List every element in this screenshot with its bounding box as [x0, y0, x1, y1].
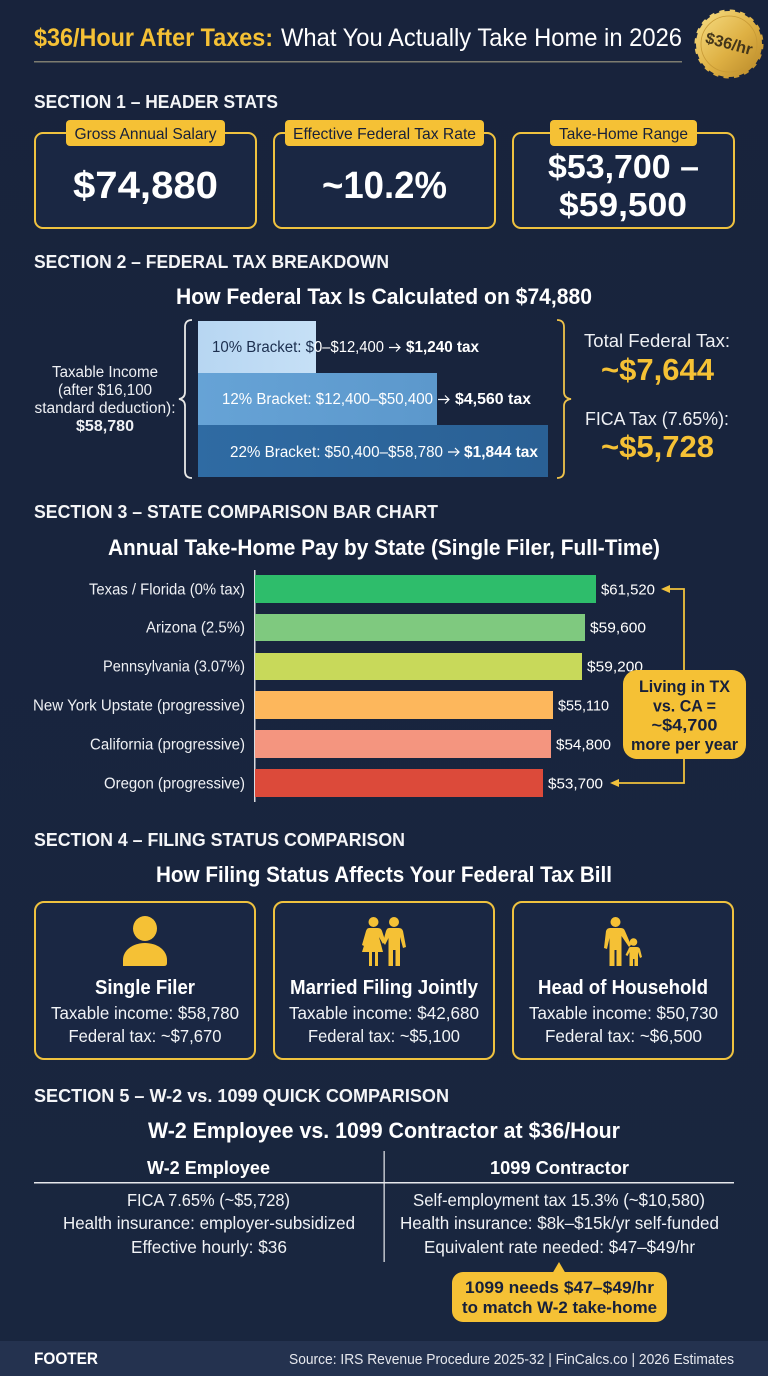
icon: gold $36/hr badge: $36/hr — [703, 30, 754, 59]
panel: single filer — [35, 902, 255, 1059]
panel: take-home range: $53,700 – — [548, 148, 699, 185]
arrow: callout to Oregon bar — [610, 757, 684, 787]
panel: single filer: Single Filer — [95, 977, 195, 999]
left brace — [179, 320, 192, 478]
arrow: callout to Texas bar — [661, 585, 684, 672]
icon: couple — [362, 917, 406, 966]
bar: Oregon: Oregon (progressive) — [104, 776, 245, 792]
icon: single person — [123, 916, 167, 966]
bar: Arizona: $59,600 — [590, 620, 646, 636]
bar: New York Upstate: $55,110 — [558, 698, 609, 714]
footer: FOOTER — [34, 1350, 98, 1368]
column: 1099 contractor: 1099 Contractor — [490, 1157, 629, 1178]
panel: head of household: Taxable income: $50,730 — [529, 1003, 718, 1023]
icon: parent and child — [604, 917, 642, 966]
column: 1099 contractor: Equivalent rate needed: $47–$49/hr — [424, 1237, 695, 1257]
callout: 1099 needs — [452, 1262, 667, 1322]
text: taxable income: (after $16,100 — [58, 382, 152, 399]
column: 1099 contractor: Self-employment tax 15.3% (~$10,580) — [413, 1190, 705, 1210]
callout: 1099 needs: to match W-2 take-home — [462, 1298, 657, 1317]
callout: 1099 needs: 1099 needs $47–$49/hr — [465, 1278, 654, 1297]
bar: Pennsylvania: $59,200 — [587, 658, 643, 676]
stats: federal and FICA totals — [584, 330, 730, 464]
stats: federal and FICA totals: ~$5,728 — [601, 429, 714, 464]
bar: California — [90, 730, 611, 758]
callout: TX vs CA: ~$4,700 — [652, 716, 718, 734]
panel: married filing jointly: Taxable income: $42,680 — [289, 1003, 479, 1023]
heading: section 1: SECTION 1 – HEADER STATS — [34, 91, 278, 112]
stats: federal and FICA totals: Total Federal Tax: — [584, 330, 730, 351]
panel: take-home range: $59,500 — [559, 186, 687, 223]
column: W-2 employee — [63, 1157, 355, 1257]
table: W-2 vs 1099 — [34, 1151, 734, 1262]
title — [34, 24, 682, 52]
column: W-2 employee: W-2 Employee — [147, 1157, 270, 1178]
panel: effective federal tax rate: ~10.2% — [322, 165, 447, 207]
panel: single filer: Federal tax: ~$7,670 — [68, 1026, 222, 1046]
12% bracket label: 12% Bracket: $12,400–$50,400 — [222, 391, 433, 408]
icon: gold $36/hr badge — [696, 11, 762, 77]
bar: California: $54,800 — [556, 736, 611, 754]
column: W-2 employee: Health insurance: employer-subsidized — [63, 1213, 355, 1233]
panel: head of household: Federal tax: ~$6,500 — [545, 1026, 702, 1046]
10% bracket label — [212, 339, 479, 356]
bar: New York Upstate: New York Upstate (progressive) — [33, 698, 245, 714]
panel: gross annual salary: $74,880 — [73, 165, 218, 207]
heading: section 4: SECTION 4 – FILING STATUS COMPARISON — [34, 829, 405, 850]
bar: California: California (progressive) — [90, 736, 245, 754]
callout: TX vs CA: vs. CA = — [653, 698, 716, 716]
chart: tax brackets — [198, 321, 548, 477]
callout: TX vs CA — [623, 670, 746, 759]
bar: New York Upstate — [33, 691, 609, 719]
panel: gross annual salary — [35, 120, 256, 228]
title: $36/Hour After Taxes: — [34, 24, 273, 52]
chart title: W-2 vs 1099: W-2 Employee vs. 1099 Contractor at $36/Hour — [148, 1118, 620, 1143]
heading: section 2: SECTION 2 – FEDERAL TAX BREAKDOWN — [34, 251, 389, 272]
bar: Texas / Florida — [89, 575, 655, 603]
callout: TX vs CA: more per year — [631, 736, 739, 754]
panel: head of household: Head of Household — [538, 977, 708, 999]
10% bracket label: 10% Bracket: $ — [212, 339, 314, 356]
bar: Texas / Florida: Texas / Florida (0% tax) — [89, 582, 245, 598]
text: taxable income: Taxable Income — [52, 364, 158, 381]
bar: Texas / Florida: $61,520 — [601, 582, 655, 598]
stats: federal and FICA totals: ~$7,644 — [601, 352, 715, 387]
footer — [0, 1341, 768, 1376]
bar: Oregon — [104, 769, 603, 797]
panel: married filing jointly: Married Filing Jointly — [290, 977, 479, 999]
right brace — [557, 320, 571, 478]
panel: married filing jointly — [274, 902, 494, 1059]
chart title: federal tax: How Federal Tax Is Calculated on $74,880 — [176, 284, 592, 309]
bar: Pennsylvania: Pennsylvania (3.07%) — [103, 658, 245, 676]
12% bracket label: $4,560 tax — [455, 391, 531, 408]
bar chart: take-home by state — [33, 570, 655, 802]
panel: head of household — [513, 902, 733, 1059]
bar: Arizona — [146, 614, 646, 641]
chart title: filing status: How Filing Status Affects Your Federal Tax Bill — [156, 862, 612, 887]
panel: single filer: Taxable income: $58,780 — [51, 1003, 239, 1023]
panel: take-home range: Take-Home Range — [559, 126, 688, 143]
10% bracket label: 0–$12,400 — [314, 339, 384, 356]
chart title: state comparison: Annual Take-Home Pay by State (Single Filer, Full-Time) — [108, 535, 660, 560]
column: 1099 contractor — [400, 1157, 719, 1257]
bar: Arizona: Arizona (2.5%) — [146, 620, 245, 636]
panel: effective federal tax rate — [274, 120, 495, 228]
heading: section 3: SECTION 3 – STATE COMPARISON BAR CHART — [34, 501, 439, 522]
10% bracket label: $1,240 tax — [406, 339, 479, 356]
panel: married filing jointly: Federal tax: ~$5,100 — [308, 1026, 460, 1046]
bar: Pennsylvania — [103, 653, 643, 680]
column: W-2 employee: FICA 7.65% (~$5,728) — [127, 1190, 290, 1210]
panel: take-home range — [513, 120, 734, 228]
stats: federal and FICA totals: FICA Tax (7.65%): — [585, 408, 729, 429]
column: 1099 contractor: Health insurance: $8k–$15k/yr self-funded — [400, 1213, 719, 1233]
column: W-2 employee: Effective hourly: $36 — [131, 1237, 287, 1257]
text: taxable income: $58,780 — [76, 418, 134, 435]
bar: Oregon: $53,700 — [548, 776, 603, 792]
text: taxable income — [34, 364, 176, 435]
title: What You Actually Take Home in 2026 — [281, 24, 682, 52]
panel: effective federal tax rate: Effective Federal Tax Rate — [293, 126, 476, 143]
panel: gross annual salary: Gross Annual Salary — [74, 126, 216, 143]
callout: TX vs CA: Living in TX — [639, 678, 730, 696]
heading: section 5: SECTION 5 – W-2 vs. 1099 QUICK COMPARISON — [34, 1085, 449, 1106]
22% bracket label: 22% Bracket: $50,400–$58,780 — [230, 444, 443, 461]
text: taxable income: standard deduction): — [34, 400, 176, 417]
22% bracket label: $1,844 tax — [464, 444, 538, 461]
footer: Source: IRS Revenue Procedure 2025-32 | FinCalcs.co | 2026 Estimates — [289, 1351, 734, 1368]
